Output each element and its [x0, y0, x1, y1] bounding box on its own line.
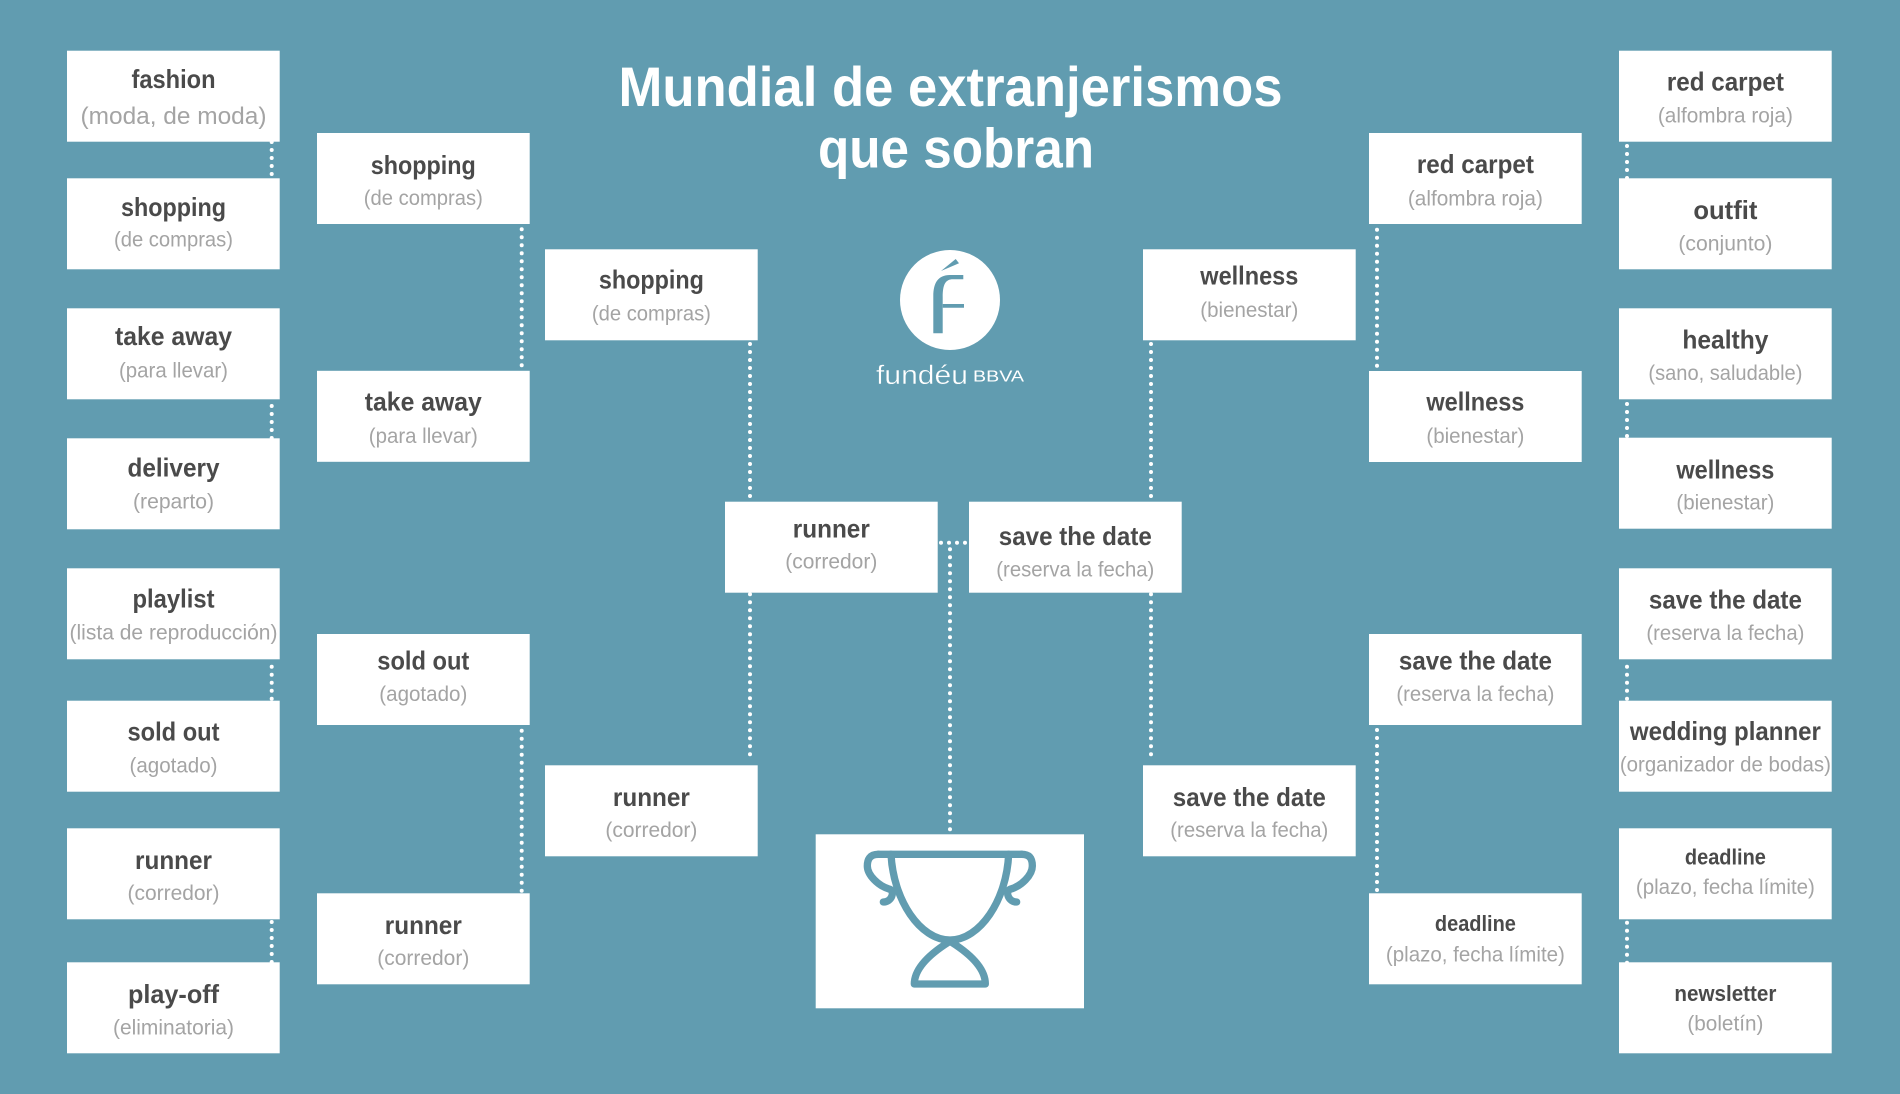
panel: left round 3 shopping: (de compras)	[592, 303, 711, 326]
panel: left round 1 fashion: fashion	[132, 64, 216, 94]
panel: right round 3 save the date: save the date	[1173, 782, 1326, 812]
panel: left round 1 playlist	[67, 568, 280, 659]
dotted connectors: third round left	[748, 344, 752, 756]
panel: right round 3 wellness: (bienestar)	[1200, 299, 1298, 322]
panel: left round 1 play-off: (eliminatoria)	[113, 1016, 234, 1039]
panel: semifinal save the date: (reserva la fecha)	[996, 558, 1154, 582]
panel: left round 1 sold out: (agotado)	[130, 755, 218, 778]
panel: right round 2 red carpet: red carpet	[1417, 149, 1534, 179]
panel: right round 2 red carpet	[1369, 133, 1582, 224]
dotted connectors: first round left	[270, 142, 274, 963]
logo: Fundéu BBVA	[876, 250, 1025, 390]
panel: right round 1 red carpet: red carpet	[1667, 67, 1784, 97]
panel: left round 2 shopping	[317, 133, 530, 224]
panel: left round 1 take away: (para llevar)	[119, 359, 228, 382]
panel: left round 2 runner: (corredor)	[377, 947, 469, 970]
panel: semifinal runner	[725, 502, 938, 593]
icon: trophy	[867, 854, 1032, 984]
panel: right round 1 wellness: (bienestar)	[1676, 492, 1774, 515]
panel: left round 1 sold out: sold out	[128, 717, 220, 747]
panel: left round 1 shopping: (de compras)	[114, 229, 233, 252]
panel: left round 1 fashion: (moda, de moda)	[80, 103, 266, 130]
panel: left round 1 play-off	[67, 962, 280, 1053]
panel: left round 3 runner: runner	[613, 782, 690, 812]
panel: left round 1 playlist: (lista de reproducción)	[70, 621, 278, 644]
panel: right round 1 save the date	[1619, 568, 1832, 659]
panel: left round 1 sold out	[67, 701, 280, 792]
panel: right round 2 wellness: (bienestar)	[1426, 425, 1524, 448]
panel: semifinal runner: runner	[793, 514, 870, 544]
panel: left round 2 sold out: (agotado)	[379, 683, 467, 706]
panel: right round 1 newsletter	[1619, 962, 1832, 1053]
panel: left round 2 sold out: sold out	[377, 646, 470, 676]
panel: right round 1 wellness: wellness	[1675, 455, 1774, 485]
panel: left round 1 runner: (corredor)	[128, 882, 220, 905]
panel: right round 1 save the date: (reserva la fecha)	[1646, 622, 1804, 645]
panel: left round 1 delivery	[67, 438, 280, 529]
panel: left round 2 shopping: shopping	[371, 150, 476, 180]
panel: left round 1 runner	[67, 828, 280, 919]
panel: right round 2 save the date: save the date	[1399, 646, 1552, 676]
dotted connectors: first round right	[1625, 146, 1629, 964]
panel: right round 1 outfit: outfit	[1693, 195, 1758, 225]
panel: left round 1 runner: runner	[135, 845, 212, 875]
panel: right round 3 save the date: (reserva la fecha)	[1170, 819, 1328, 842]
panel: right round 1 red carpet: (alfombra roja)	[1658, 104, 1793, 127]
panel: right round 3 wellness	[1143, 249, 1356, 340]
panel: right round 3 wellness: wellness	[1199, 261, 1298, 291]
panel: right round 1 outfit	[1619, 178, 1832, 269]
panel: right round 1 deadline: deadline	[1685, 844, 1766, 869]
panel: left round 3 runner	[545, 765, 758, 856]
panel: left round 3 shopping	[545, 249, 758, 340]
panel: left round 1 take away	[67, 308, 280, 399]
panel: left round 1 shopping: shopping	[121, 192, 226, 222]
panel: left round 2 take away	[317, 371, 530, 462]
title: Mundial de extranjerismos	[618, 55, 1282, 118]
panel: trophy	[816, 834, 1084, 1008]
panel: left round 2 runner	[317, 893, 530, 984]
panel: left round 3 runner: (corredor)	[605, 819, 697, 842]
panel: right round 3 save the date	[1143, 765, 1356, 856]
panel: left round 2 runner: runner	[385, 910, 462, 940]
panel: right round 1 wedding planner	[1619, 701, 1832, 792]
panel: right round 1 healthy: healthy	[1682, 325, 1769, 355]
panel: right round 1 red carpet	[1619, 51, 1832, 142]
panel: right round 1 newsletter: newsletter	[1674, 981, 1777, 1006]
panel: left round 1 play-off: play-off	[128, 979, 219, 1009]
panel: right round 1 wedding planner: wedding planner	[1629, 716, 1821, 746]
panel: left round 1 playlist: playlist	[132, 584, 215, 614]
panel: left round 1 delivery: (reparto)	[133, 491, 214, 514]
panel: left round 2 sold out	[317, 634, 530, 725]
panel: right round 1 save the date: save the date	[1649, 584, 1802, 614]
logo: Fundéu BBVA: BBVA	[973, 369, 1025, 386]
panel: right round 2 deadline: (plazo, fecha límite)	[1386, 944, 1565, 967]
panel: right round 2 wellness: wellness	[1425, 387, 1524, 417]
panel: right round 1 outfit: (conjunto)	[1678, 233, 1772, 256]
panel: right round 1 healthy: (sano, saludable)	[1648, 362, 1802, 385]
panel: right round 2 deadline: deadline	[1435, 911, 1516, 936]
panel: right round 1 newsletter: (boletín)	[1687, 1013, 1763, 1036]
title	[618, 55, 1282, 180]
dotted connectors: second round left	[520, 229, 524, 892]
panel: right round 2 red carpet: (alfombra roja)	[1408, 188, 1543, 210]
title: que sobran	[818, 117, 1094, 180]
panel: right round 1 wedding planner: (organizador de bodas)	[1620, 754, 1831, 777]
dotted connectors: final	[941, 543, 966, 830]
dotted connectors: second round right	[1375, 230, 1379, 891]
panel: right round 2 save the date: (reserva la fecha)	[1396, 683, 1554, 706]
panel: right round 1 deadline: (plazo, fecha límite)	[1636, 876, 1815, 899]
panel: left round 2 take away: (para llevar)	[369, 425, 478, 448]
panel: left round 2 take away: take away	[365, 386, 482, 416]
panel: right round 2 deadline	[1369, 893, 1582, 984]
panel: left round 1 take away: take away	[115, 321, 233, 351]
panel: left round 1 delivery: delivery	[128, 453, 220, 483]
panel: left round 2 shopping: (de compras)	[364, 187, 483, 210]
panel: right round 2 wellness	[1369, 371, 1582, 462]
panel: right round 1 wellness	[1619, 438, 1832, 529]
panel: right round 1 healthy	[1619, 308, 1832, 399]
panel: semifinal save the date	[969, 502, 1182, 593]
panel: semifinal save the date: save the date	[999, 521, 1152, 551]
panel: left round 1 fashion	[67, 51, 280, 142]
dotted connectors: third round right	[1149, 344, 1153, 756]
panel: right round 1 deadline	[1619, 828, 1832, 919]
panel: semifinal runner: (corredor)	[785, 550, 877, 574]
panel: left round 1 shopping	[67, 178, 280, 269]
panel: right round 2 save the date	[1369, 634, 1582, 725]
logo: Fundéu BBVA: fundéu	[876, 360, 968, 390]
panel: left round 3 shopping: shopping	[599, 264, 704, 294]
